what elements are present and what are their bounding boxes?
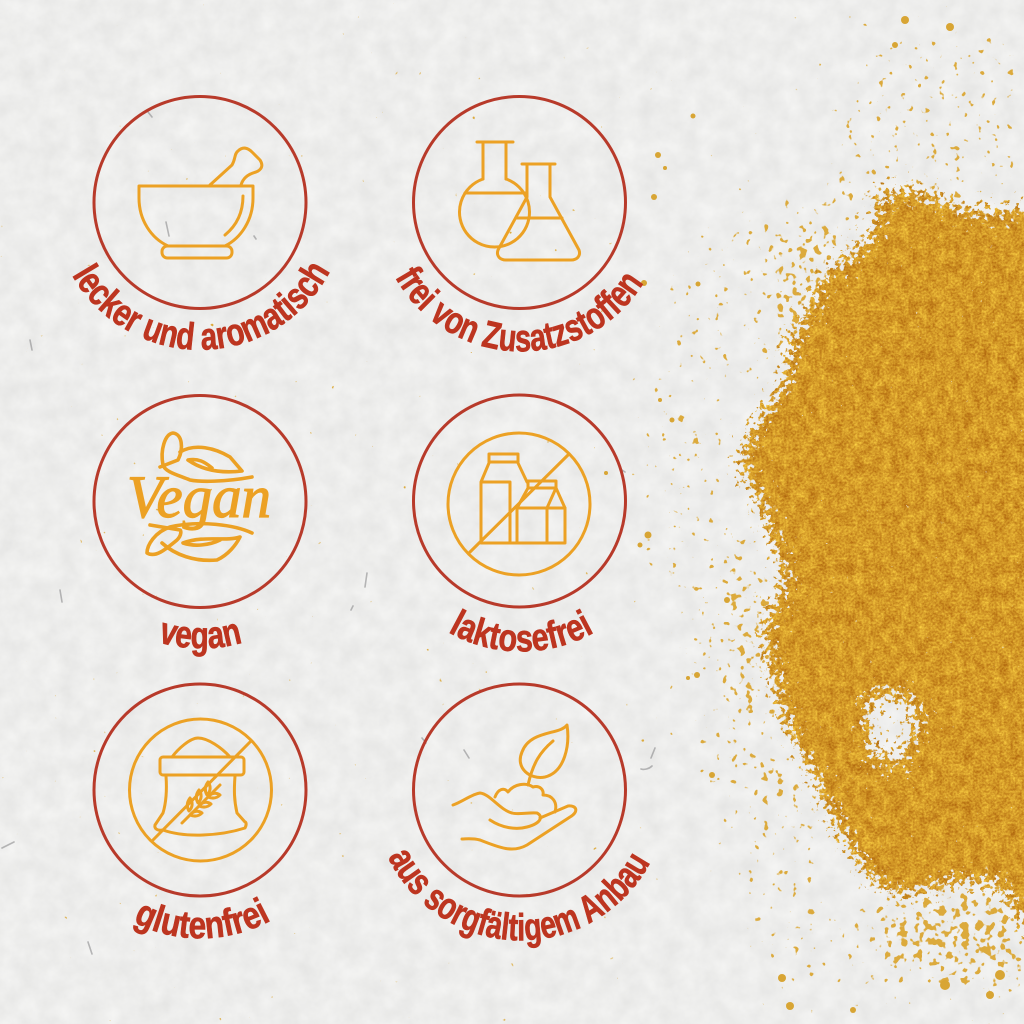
powder scatter: loose grains <box>640 20 1024 1024</box>
script word Vegan: Vegan <box>127 464 271 530</box>
label: glutenfrei: glutenfrei <box>133 896 270 939</box>
icon: crossed-out milk cartons <box>448 433 590 575</box>
paper fibres and specks <box>2 112 655 954</box>
icon: mortar and pestle <box>139 148 262 258</box>
badge: vegan <box>92 394 308 657</box>
badge: lecker und aromatisch <box>72 95 330 350</box>
badge: glutenfrei <box>92 682 308 939</box>
badge: aus sorgfältigem Anbau <box>389 682 650 948</box>
powder pile <box>733 186 1024 960</box>
icon: hand holding a seedling <box>453 725 576 849</box>
loose spice grains <box>604 16 1005 1013</box>
badge: frei von Zusatzstoffen <box>396 95 644 352</box>
label: vegan: vegan <box>162 622 242 657</box>
label: laktosefrei: laktosefrei <box>449 608 593 652</box>
icon: vegan lettering with leaves <box>127 433 271 560</box>
label: lecker und aromatisch: lecker und aromatisch <box>72 262 330 350</box>
label: frei von Zusatzstoffen: frei von Zusatzstoffen <box>396 266 644 352</box>
icon: laboratory flasks <box>460 142 580 260</box>
label: aus sorgfältigem Anbau: aus sorgfältigem Anbau <box>389 850 650 948</box>
icon: crossed-out flour sack <box>130 719 272 861</box>
badge: laktosefrei <box>412 394 627 652</box>
leaf flourishes <box>147 433 252 560</box>
